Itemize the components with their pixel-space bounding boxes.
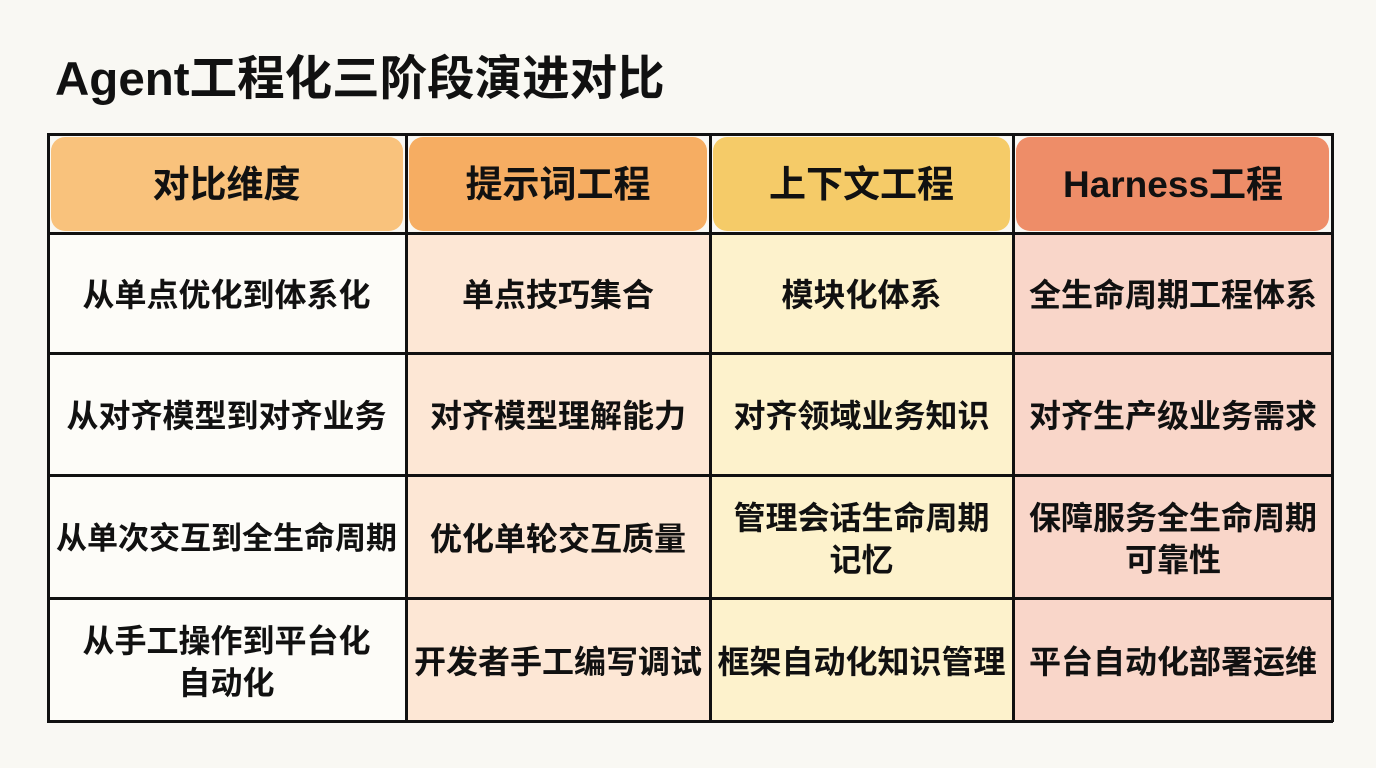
row 2: 从对齐模型到对齐业务 [66, 398, 386, 434]
body cell backgrounds [408, 235, 1331, 720]
row 1: 单点技巧集合 [462, 277, 654, 313]
header boxes [51, 137, 1329, 231]
comparison table [47, 133, 1334, 723]
row 2: 对齐领域业务知识 [733, 398, 990, 434]
row 2: 对齐模型理解能力 [430, 398, 686, 434]
header row [152, 164, 1283, 205]
row 4: 框架自动化知识管理 [717, 644, 1006, 680]
row 2 [66, 398, 1317, 434]
row 3: 从单次交互到全生命周期 [56, 520, 397, 556]
row 1: 模块化体系 [781, 277, 942, 313]
row 3: 可靠性 [1125, 542, 1221, 578]
row 3: 记忆 [829, 542, 894, 578]
row 4: 平台自动化部署运维 [1029, 644, 1317, 680]
row 4: 从手工操作到平台化 [82, 622, 370, 658]
row 3: 管理会话生命周期 [733, 500, 990, 536]
row 2: 对齐生产级业务需求 [1029, 398, 1317, 434]
row 3: 保障服务全生命周期 [1029, 500, 1317, 536]
header row: 上下文工程 [769, 164, 954, 205]
row 1 [82, 277, 1317, 313]
row 4 [82, 622, 1317, 700]
row 3 [56, 500, 1317, 578]
header row: Harness工程 [1063, 164, 1283, 205]
header row: 提示词工程 [466, 164, 650, 205]
title: Agent工程化三阶段演进对比 [55, 53, 665, 106]
row 1: 全生命周期工程体系 [1029, 277, 1317, 313]
header row: 对比维度 [152, 164, 300, 205]
row 3: 优化单轮交互质量 [430, 520, 686, 556]
row 4: 自动化 [178, 664, 274, 700]
grid lines [47, 133, 1334, 723]
row 4: 开发者手工编写调试 [414, 644, 702, 680]
row 1: 从单点优化到体系化 [82, 277, 370, 313]
